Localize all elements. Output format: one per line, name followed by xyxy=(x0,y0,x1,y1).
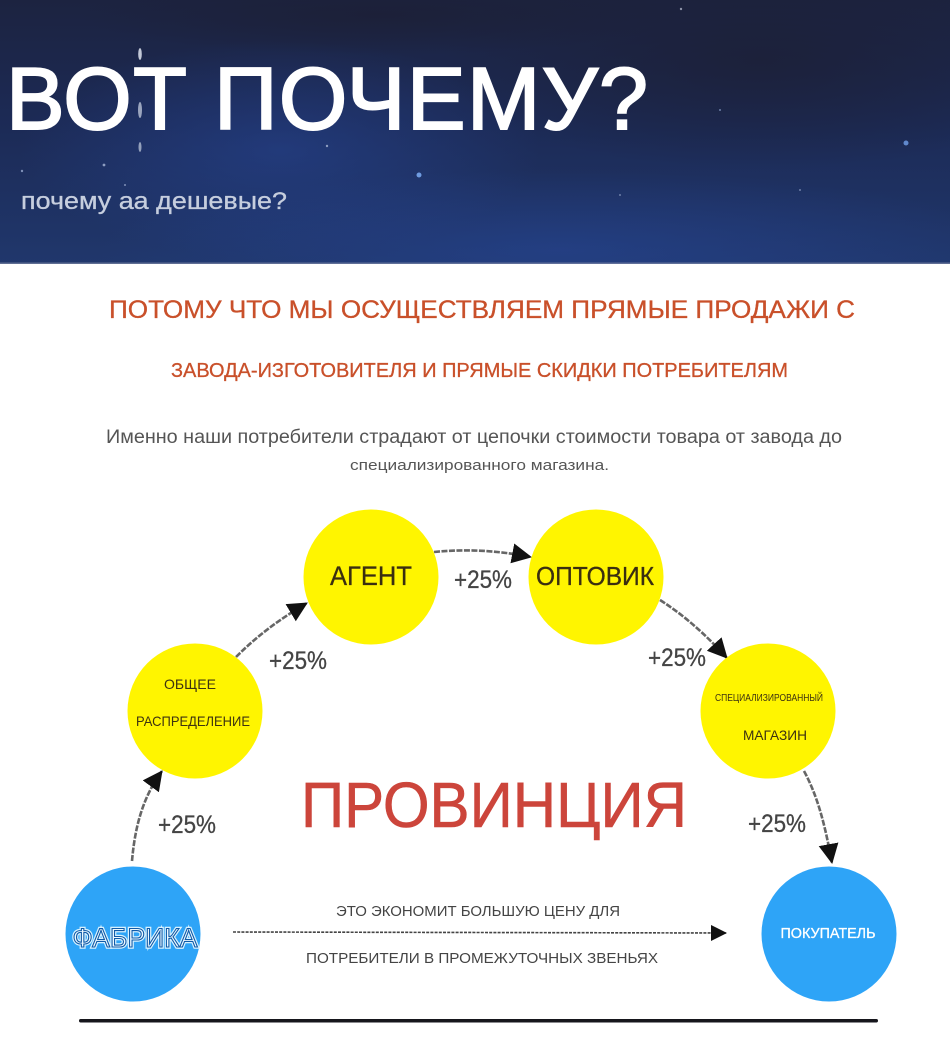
label: +25% factory: +25% xyxy=(158,811,216,839)
node: wholesaler xyxy=(528,510,664,644)
node: buyer: ПОКУПАТЕЛЬ xyxy=(780,926,876,942)
node: factory: ФАБРИКА xyxy=(72,923,198,953)
subtitle: почему аа дешевые? xyxy=(21,188,287,215)
label: +25% store: +25% xyxy=(748,810,806,838)
description line 1: Именно наши потребители страдают от цепочки стоимости товара от завода до xyxy=(106,427,842,448)
arrow: agent to wholesaler xyxy=(434,550,531,557)
node: specialized store: МАГАЗИН xyxy=(743,727,807,743)
arrow: factory to distribution xyxy=(132,771,162,861)
arrow: distribution to agent xyxy=(236,603,307,657)
arrow: wholesaler to store xyxy=(660,600,727,658)
label: +25% wholesaler: +25% xyxy=(648,644,706,672)
savings text line 1: ЭТО ЭКОНОМИТ БОЛЬШУЮ ЦЕНУ ДЛЯ xyxy=(336,903,620,920)
node: specialized store: СПЕЦИАЛИЗИРОВАННЫЙ xyxy=(715,691,823,704)
node: general distribution: ОБЩЕЕ xyxy=(164,676,216,692)
label: +25% agent: +25% xyxy=(454,566,512,594)
node: buyer xyxy=(762,866,896,1002)
node: factory xyxy=(66,866,200,1002)
header banner xyxy=(0,0,950,264)
baseline xyxy=(79,1019,878,1022)
description line 2: специализированного магазина. xyxy=(350,457,609,474)
label: +25% distribution: +25% xyxy=(269,647,327,675)
node: general distribution xyxy=(128,644,262,778)
arrow: store to buyer xyxy=(804,771,832,863)
title: ВОТ ПОЧЕМУ? xyxy=(6,49,648,148)
node: agent: АГЕНТ xyxy=(330,561,412,591)
node: specialized store xyxy=(700,644,836,778)
node: agent xyxy=(304,510,438,644)
node: wholesaler: ОПТОВИК xyxy=(536,561,654,591)
heading line 2: ЗАВОДА-ИЗГОТОВИТЕЛЯ И ПРЯМЫЕ СКИДКИ ПОТРЕБИТЕЛЯМ xyxy=(171,360,788,382)
savings text line 2: ПОТРЕБИТЕЛИ В ПРОМЕЖУТОЧНЫХ ЗВЕНЬЯХ xyxy=(306,950,658,967)
region label: ПРОВИНЦИЯ xyxy=(301,769,687,841)
node: factory: ФАБРИКА xyxy=(72,923,198,953)
arrow: factory to buyer direct xyxy=(233,932,726,933)
node: general distribution: РАСПРЕДЕЛЕНИЕ xyxy=(136,713,250,729)
heading line 1: ПОТОМУ ЧТО МЫ ОСУЩЕСТВЛЯЕМ ПРЯМЫЕ ПРОДАЖИ С xyxy=(109,296,855,324)
